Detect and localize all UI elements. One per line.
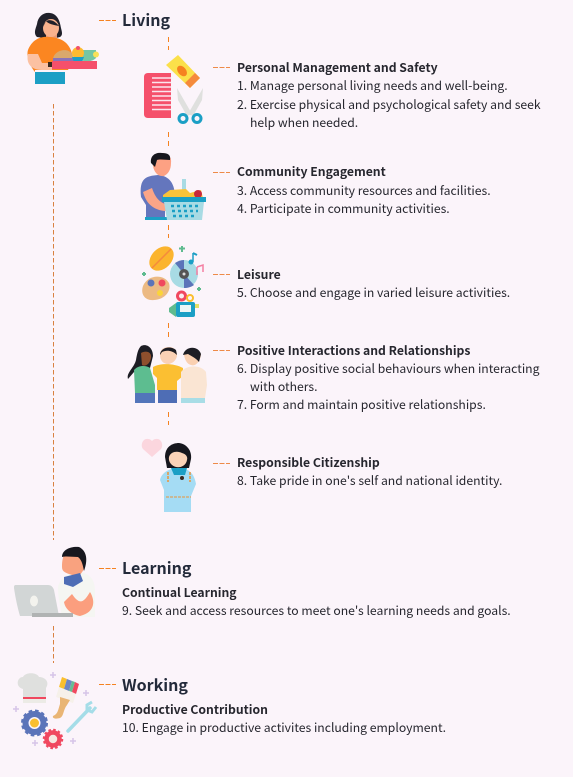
- text block: Community Engagement: 3. Access community resources and facilities.: [237, 181, 491, 199]
- text block: Positive Interactions and Relationships: 7. Form and maintain positive relationships.: [237, 395, 486, 413]
- text block: Leisure: Leisure: [237, 265, 281, 283]
- icon: comb, cream tube and scissors: [144, 55, 203, 122]
- text block: Community Engagement: [237, 162, 491, 217]
- text block: Personal Management and Safety: [237, 58, 541, 131]
- text block: Responsible Citizenship: [237, 453, 502, 489]
- text block: Continual Learning: 9. Seek and access resources to meet one's learning needs and goals.: [122, 601, 511, 619]
- icon: chef hat, paint brush, gears and spanner: [13, 672, 96, 748]
- text block: Positive Interactions and Relationships: [237, 341, 540, 413]
- text block: Continual Learning: Continual Learning: [122, 583, 237, 601]
- text block: Personal Management and Safety: help when needed.: [250, 113, 358, 131]
- heading: Learning: Learning: [122, 555, 191, 579]
- icon: leisure activities: [142, 242, 203, 317]
- connector lines: [54, 20, 230, 684]
- text block: Community Engagement: 4. Participate in community activities.: [237, 199, 450, 217]
- text block: Productive Contribution: [122, 700, 446, 736]
- text block: Productive Contribution: 10. Engage in productive activites including employment.: [122, 718, 446, 736]
- icon: woman carrying food tray: [27, 13, 99, 84]
- text block: Leisure: 5. Choose and engage in varied leisure activities.: [237, 283, 510, 301]
- text block: Community Engagement: Community Engagement: [237, 162, 386, 180]
- icon: boy using laptop: [14, 547, 95, 617]
- text block: Personal Management and Safety: 1. Manage personal living needs and well-being.: [237, 76, 508, 94]
- text block: Positive Interactions and Relationships: with others.: [250, 377, 318, 395]
- icon: person with grocery basket: [141, 153, 206, 220]
- text block: Responsible Citizenship: 8. Take pride in one's self and national identity.: [237, 471, 502, 489]
- text block: Leisure: [237, 265, 510, 301]
- text block: Personal Management and Safety: 2. Exercise physical and psychological safety and seek: [237, 95, 541, 113]
- text block: Responsible Citizenship: Responsible Citizenship: [237, 453, 380, 471]
- heading: Living: Living: [122, 7, 170, 31]
- text block: Productive Contribution: Productive Contribution: [122, 700, 268, 718]
- text block: Personal Management and Safety: Personal Management and Safety: [237, 58, 438, 76]
- heading: Working: Working: [122, 672, 188, 696]
- text block: Positive Interactions and Relationships: 6. Display positive social behaviours when interacting: [237, 359, 540, 377]
- text block: Continual Learning: [122, 583, 511, 619]
- text block: Positive Interactions and Relationships: Positive Interactions and Relationships: [237, 341, 470, 359]
- icon: three friends together: [128, 345, 207, 403]
- icon: girl with hand on heart: [142, 439, 196, 512]
